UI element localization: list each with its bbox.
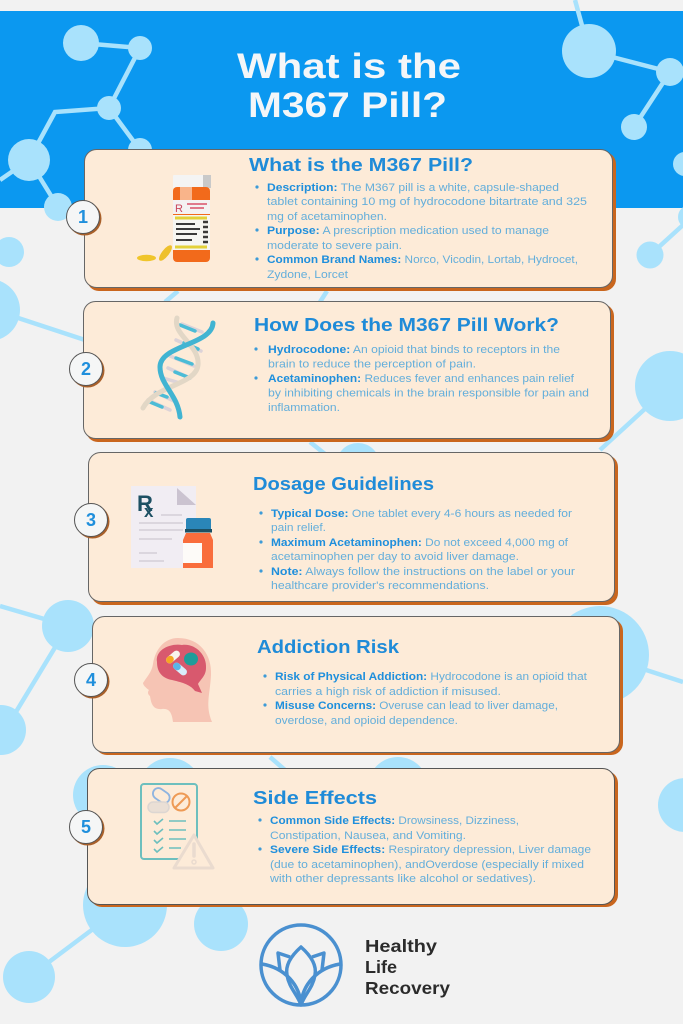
text block: inflammation. <box>268 402 340 414</box>
icon: head with brain and pills <box>143 638 212 722</box>
text block: Risk of Physical Addiction: Hydrocodone is an opioid that <box>275 671 588 683</box>
text block: Zydone, Lorcet <box>267 269 349 281</box>
text block: acetaminophen per day to avoid liver damage. <box>271 551 519 563</box>
number badge 3: 3 <box>86 510 96 530</box>
text block: Acetaminophen: Reduces fever and enhances pain relief <box>268 373 575 385</box>
title: What is the <box>237 47 461 86</box>
text block <box>254 344 589 414</box>
number badge 5: 5 <box>81 817 91 837</box>
logo: Healthy Life Recovery <box>261 925 450 1005</box>
text block: brain to reduce the perception of pain. <box>268 358 476 370</box>
panel: addiction risk <box>92 616 623 755</box>
number badge 4: 4 <box>86 670 96 690</box>
text block: Typical Dose: One tablet every 4-6 hours as needed for <box>271 508 572 520</box>
logo text: Recovery <box>365 978 450 998</box>
text block <box>255 182 587 281</box>
text block: carries a high risk of addiction if misused. <box>275 686 501 698</box>
number badge 2 <box>70 352 104 388</box>
heading: Dosage Guidelines <box>253 474 434 494</box>
header band <box>0 11 683 208</box>
number badge 4 <box>74 664 110 698</box>
number badge 1 <box>66 200 102 236</box>
logo text <box>365 936 450 998</box>
text block: overdose, and opioid dependence. <box>275 715 458 727</box>
number badge 2: 2 <box>81 359 91 379</box>
heading: How Does the M367 Pill Work? <box>254 315 559 335</box>
heading: What is the M367 Pill? <box>249 155 473 175</box>
icon: pill bottle: R <box>175 203 183 215</box>
panel: what is the M367 pill <box>84 150 616 291</box>
panel: side effects <box>88 768 618 907</box>
number badge 3 <box>74 504 110 538</box>
text block: Severe Side Effects: Respiratory depression, Liver damage <box>270 844 591 856</box>
number badge 5 <box>70 810 104 846</box>
text block: Hydrocodone: An opioid that binds to receptors in the <box>268 344 560 356</box>
text block <box>259 508 575 592</box>
text block: Maximum Acetaminophen: Do not exceed 4,000 mg of <box>271 537 569 549</box>
text block: Common Brand Names: Norco, Vicodin, Lortab, Hydrocet, <box>267 254 578 266</box>
text block: (due to acetaminophen), andOverdose (especially if mixed <box>270 859 584 871</box>
text block: with other depressants like alcohol or sedatives). <box>269 873 536 885</box>
text block: Common Side Effects: Drowsiness, Dizziness, <box>270 815 519 827</box>
icon: prescription and bottle: R <box>137 491 153 516</box>
text block: by inhibiting chemicals in the brain responsible for pain and <box>268 388 589 400</box>
icon: prescription and bottle <box>131 486 213 568</box>
heading: Addiction Risk <box>257 637 400 657</box>
panel: dosage guidelines <box>88 452 618 605</box>
text block: mg of acetaminophen. <box>267 211 387 223</box>
text block: moderate to severe pain. <box>267 240 402 252</box>
icon: checklist with warning <box>141 784 213 868</box>
icon: lotus <box>261 925 341 1005</box>
heading: Side Effects <box>253 788 377 808</box>
text block: Note: Always follow the instructions on the label or your <box>271 566 575 578</box>
text block: healthcare provider's recommendations. <box>271 580 489 592</box>
title: M367 Pill? <box>248 86 447 125</box>
number badge 1: 1 <box>78 207 88 227</box>
icon: prescription and bottle: x <box>144 502 154 521</box>
panel: how does the pill work <box>84 302 614 442</box>
text block <box>263 671 588 727</box>
logo text: Healthy <box>365 936 437 956</box>
logo text: Life <box>365 957 397 977</box>
text block <box>258 815 591 885</box>
icon: pill bottle <box>137 175 211 263</box>
text block: tablet containing 10 mg of hydrocodone bitartrate and 325 <box>267 196 587 208</box>
icon: DNA helix <box>143 318 213 417</box>
text block: Description: The M367 pill is a white, capsule-shaped <box>267 182 559 194</box>
text block: Purpose: A prescription medication used to manage <box>267 225 549 237</box>
text block: Misuse Concerns: Overuse can lead to liver damage, <box>275 700 558 712</box>
text block: pain relief. <box>271 522 326 534</box>
text block: Constipation, Nausea, and Vomiting. <box>270 830 466 842</box>
title <box>237 47 461 125</box>
